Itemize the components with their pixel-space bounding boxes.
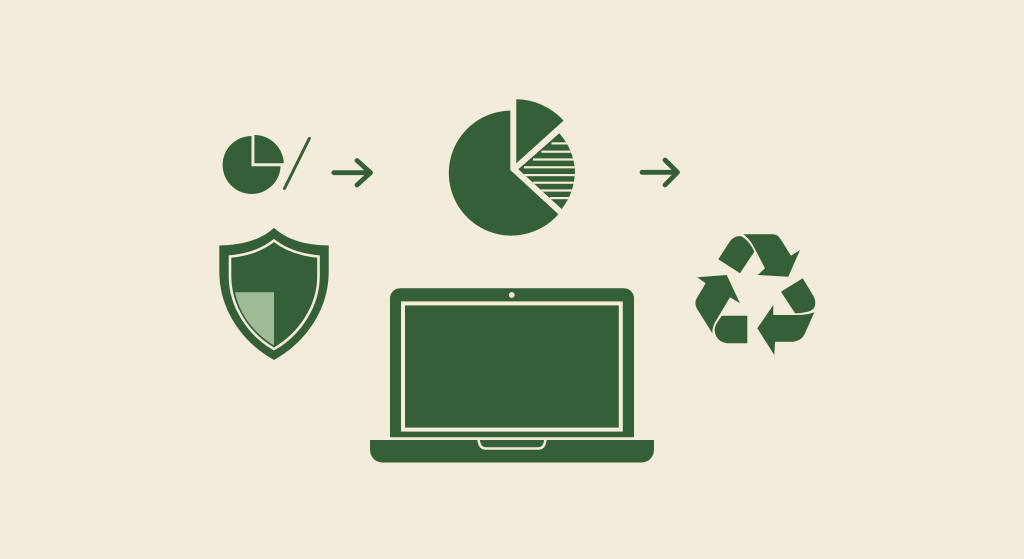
shield body xyxy=(219,228,329,360)
recycling bottom-right arrow xyxy=(757,305,814,355)
large pie main body xyxy=(449,111,558,236)
large pie striped slice xyxy=(518,133,575,209)
icon: laptop xyxy=(370,288,654,462)
laptop camera xyxy=(509,292,515,298)
recycling right piece xyxy=(781,278,815,313)
small pie main body xyxy=(223,136,281,194)
recycling top-right arrow xyxy=(743,234,800,277)
recycling left arrow xyxy=(695,275,740,333)
laptop base xyxy=(370,440,654,462)
large pie top slice xyxy=(516,99,564,163)
laptop screen outline xyxy=(403,303,621,430)
small pie raised slice xyxy=(254,135,284,163)
laptop trackpad notch xyxy=(478,440,546,448)
shield inner outline xyxy=(230,240,318,349)
icon: recycling symbol xyxy=(695,234,815,355)
arrow: first xyxy=(334,160,370,185)
slash xyxy=(284,138,309,188)
recycling top-left piece xyxy=(718,236,754,273)
icon: shield xyxy=(219,228,329,360)
arrow: second xyxy=(642,160,678,185)
laptop lid xyxy=(390,288,634,437)
icon: large pie chart xyxy=(449,99,582,236)
infographic canvas xyxy=(219,99,816,462)
icon: small pie chart with slash xyxy=(223,135,309,194)
shield light quadrant xyxy=(235,292,274,346)
recycling bottom-left piece xyxy=(715,316,747,343)
